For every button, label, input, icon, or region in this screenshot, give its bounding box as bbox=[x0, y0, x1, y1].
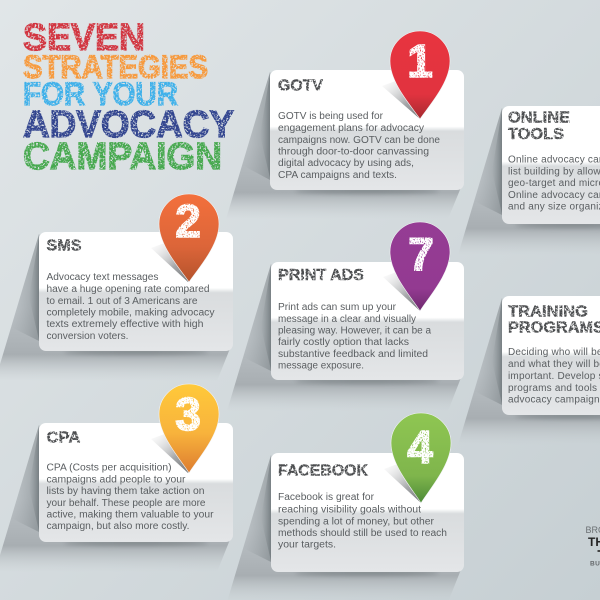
text block: Print Ads: message exposure. bbox=[278, 360, 364, 372]
text block: SMS: to email. 1 out of 3 Americans are bbox=[46, 296, 198, 307]
text block: GOTV: engagement plans for advocacy bbox=[278, 123, 424, 134]
title: SEVEN bbox=[23, 17, 145, 59]
text block: Print Ads: fairly costly option that lacks bbox=[278, 337, 409, 348]
text block: Print Ads: substantive feedback and limited bbox=[278, 349, 428, 360]
panel: Facebook bbox=[227, 413, 464, 600]
title bbox=[23, 17, 234, 178]
text block: SMS: have a huge opening rate compared bbox=[46, 284, 210, 295]
panel: CPA bbox=[0, 384, 233, 572]
heading: GOTV: GOTV bbox=[278, 78, 323, 94]
heading: Training Programs bbox=[508, 304, 600, 337]
text block: Online Tools bbox=[508, 155, 600, 212]
icon: pin 1: 1 bbox=[407, 35, 433, 87]
text block: Print Ads: message in a clear and visually bbox=[278, 314, 416, 325]
heading: Training Programs: TRAINING bbox=[508, 304, 588, 321]
text block: GOTV: CPA campaigns and texts. bbox=[278, 170, 397, 181]
text block: Facebook: your targets. bbox=[278, 539, 336, 550]
icon: pin 3: 3 bbox=[175, 388, 201, 440]
text block: Facebook: Facebook is great for bbox=[278, 492, 375, 503]
credit: brought to you by bbox=[586, 525, 600, 568]
icon: pin 4 bbox=[391, 413, 451, 503]
heading: Online Tools: TOOLS bbox=[508, 126, 564, 143]
text block: CPA: CPA (Costs per acquisition) bbox=[46, 463, 172, 474]
heading: Online Tools bbox=[508, 110, 570, 143]
text block: GOTV bbox=[278, 111, 440, 181]
heading: Facebook: FACEBOOK bbox=[278, 463, 368, 480]
heading: Online Tools: ONLINE bbox=[508, 110, 570, 127]
text block: Print Ads: pleasing way. However, it can be a bbox=[278, 326, 431, 336]
icon: pin 2 bbox=[159, 194, 219, 282]
text block: SMS: Advocacy text messages bbox=[46, 272, 158, 283]
text block: Training Programs bbox=[508, 347, 600, 406]
panel: Training Programs bbox=[458, 296, 600, 445]
text block: GOTV: digital advocacy by using ads, bbox=[278, 158, 414, 169]
heading: CPA: CPA bbox=[46, 430, 81, 447]
text block: GOTV: through door-to-door canvassing bbox=[278, 146, 429, 158]
text block: Facebook: reaching visibility goals without bbox=[278, 504, 421, 515]
text block: SMS: completely mobile, making advocacy bbox=[46, 308, 214, 318]
panel: Print Ads bbox=[227, 222, 464, 411]
text block: Print Ads bbox=[278, 302, 431, 372]
text block: GOTV: campaigns now. GOTV can be done bbox=[278, 135, 440, 146]
text block: CPA: lists by having them take action on bbox=[46, 486, 204, 497]
title: ADVOCACY bbox=[23, 104, 234, 146]
title: CAMPAIGN bbox=[23, 136, 222, 178]
text block: SMS bbox=[46, 272, 214, 342]
panel: GOTV bbox=[226, 31, 464, 219]
icon: pin 7: 7 bbox=[408, 228, 434, 280]
panel: SMS bbox=[0, 194, 233, 381]
icon: pin 4: 4 bbox=[407, 421, 433, 473]
text block: CPA: campaign, but also more costly. bbox=[46, 521, 190, 532]
icon: pin 3 bbox=[159, 384, 219, 473]
heading: Training Programs: PROGRAMS bbox=[508, 320, 600, 337]
text block: Facebook: spending a lot of money, but other bbox=[278, 516, 435, 527]
text block: SMS: texts extremely effective with high bbox=[46, 319, 204, 330]
heading: SMS: SMS bbox=[46, 238, 82, 255]
title: FOR YOUR bbox=[23, 76, 178, 112]
text block: CPA: campaigns add people to your bbox=[46, 474, 186, 486]
text block: Print Ads: Print ads can sum up your bbox=[278, 302, 397, 313]
icon: pin 1 bbox=[390, 31, 450, 119]
text block: Facebook bbox=[278, 492, 447, 550]
text block: CPA bbox=[46, 463, 214, 532]
icon: pin 2: 2 bbox=[175, 195, 201, 247]
text block: Facebook: methods should still be used to reach bbox=[278, 528, 447, 539]
text block: CPA: your behalf. These people are more bbox=[46, 498, 206, 509]
text block: CPA: active, making them valuable to your bbox=[46, 510, 214, 520]
text block: Training Programs: Deciding who will be bbox=[508, 347, 600, 358]
panel: Online Tools bbox=[458, 106, 600, 255]
text block: SMS: conversion voters. bbox=[46, 331, 128, 342]
text block: GOTV: GOTV is being used for bbox=[278, 111, 384, 122]
icon: pin 7 bbox=[390, 222, 450, 311]
title: STRATEGIES bbox=[23, 49, 208, 85]
heading: Print Ads: PRINT ADS bbox=[278, 267, 364, 284]
